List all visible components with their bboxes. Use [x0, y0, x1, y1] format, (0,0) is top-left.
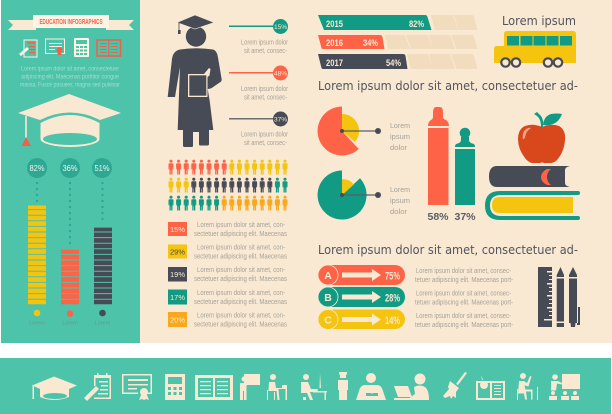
strip icon: student raising hand: [517, 373, 538, 400]
percent bar: 36% coral: Lorem: [62, 320, 78, 326]
legend row: 20%: 20%: [170, 316, 185, 324]
callout: 15%: 15%: [274, 24, 287, 31]
callout: 48%: Lorem ipsum dolor: [241, 86, 289, 93]
year progress bars: 34%: [363, 38, 378, 49]
bar: 37% green with bust top: 37%: [454, 211, 476, 223]
pill bar: C 14%: [318, 310, 405, 330]
percent bar: 82% yellow: [27, 158, 47, 326]
legend row: 17%: 17%: [170, 293, 185, 302]
pie chart: green: dolor: [390, 209, 408, 216]
intro text: adipiscing elit. Maecenas porttitor congue: [21, 74, 119, 80]
pill bar: C 14%: 14%: [385, 315, 400, 327]
strip icon: teacher with students: [549, 374, 580, 400]
legend row: 15%: Lorem ipsum dolor sit amet, con-: [197, 222, 286, 229]
intro text: [20, 66, 121, 88]
callout: 15%: sit amet, consec-: [244, 48, 288, 55]
callout: 48%: 48%: [274, 70, 287, 78]
pill bar: B 28%: [318, 287, 405, 307]
callout: 48%: sit amet, consec-: [244, 94, 288, 102]
legend row: 15%: 15%: [170, 225, 185, 234]
pie chart: green: Lorem: [390, 187, 410, 194]
strip icon: student at desk: [267, 374, 287, 400]
bottom icon strip: [0, 358, 611, 414]
panel: cream main area: [140, 0, 612, 343]
icon: calendar and pencil: [19, 40, 37, 57]
heading: section two: Lorem ipsum dolor sit amet, consectetuer ad-: [318, 243, 578, 257]
strip icon: graduation cap: [32, 376, 77, 400]
percent bar: 82% yellow: Lorem: [29, 320, 45, 326]
legend row: 19%: sectetuer adipiscing elit. Maecenas: [194, 276, 287, 283]
percent bar: 36% coral: [60, 158, 80, 326]
legend row: 29%: [168, 244, 287, 260]
callout: 37%: 37%: [274, 116, 287, 124]
pie chart: green: [318, 170, 410, 219]
pill text A: Lorem ipsum dolor sit amet, consec-: [416, 268, 512, 275]
ribbon heading: [8, 15, 134, 30]
legend row: 17%: Lorem ipsum dolor sit amet, con-: [197, 290, 286, 297]
legend row: 19%: [168, 267, 287, 283]
legend row: 19%: Lorem ipsum dolor sit amet, con-: [197, 267, 286, 274]
percent bar: 51% dark: [92, 158, 112, 326]
strip icon: student at computer: [301, 373, 327, 400]
strip icon: certificate: [122, 374, 152, 400]
pie chart: coral: Lorem: [390, 123, 410, 130]
legend row: 20%: [168, 312, 287, 328]
percent bar: 51% dark: Lorem: [95, 320, 111, 326]
strip icon: person with laptop: [394, 374, 429, 400]
heading: Lorem ipsum: Lorem ipsum: [502, 14, 576, 28]
legend row: 15%: [168, 222, 287, 238]
legend row: 19%: 19%: [170, 270, 185, 279]
icon: calculator: [74, 38, 89, 57]
pill text B: tetuer adipiscing elit. Maecenas port-: [415, 300, 514, 306]
strip icon: calculator: [165, 374, 185, 400]
year progress bars: 2017: [326, 58, 343, 69]
strip icon: broom: [443, 372, 467, 399]
pill bar: A 75%: A: [324, 270, 332, 282]
legend row: 29%: sectetuer adipiscing elit. Maecenas: [194, 254, 287, 260]
percent bar: 82% yellow: 82%: [30, 164, 44, 173]
legend row: 29%: Lorem ipsum dolor sit amet, con-: [197, 244, 286, 252]
legend row: 20%: Lorem ipsum dolor sit amet, con-: [197, 312, 286, 320]
pictogram grid of people: [168, 160, 288, 210]
pill bar: A 75%: 75%: [385, 270, 400, 282]
percent bar: 51% dark: 51%: [94, 164, 110, 173]
year progress bars: 2016: [326, 38, 343, 49]
percent bar: 36% coral: 36%: [62, 164, 78, 173]
year progress bars: 54%: [386, 58, 401, 69]
icon: certificate: [46, 39, 64, 55]
pill text B: Lorem ipsum dolor sit amet, consec-: [416, 290, 512, 298]
legend row: 29%: 29%: [170, 248, 185, 256]
legend row: 20%: sectetuer adipiscing elit. Maecenas: [194, 322, 287, 328]
bar: 58% coral with marker top: 58%: [427, 211, 449, 223]
icon: school bus: [494, 31, 576, 67]
bar: 58% coral with marker top: [427, 107, 449, 223]
bar: 37% green with bust top: [454, 128, 476, 223]
pill bar: B 28%: B: [324, 292, 332, 304]
year progress bars: [318, 15, 478, 69]
legend row: 15%: sectetuer adipiscing elit. Maecenas: [194, 231, 287, 238]
ribbon heading: EDUCATION INFOGRAPHICS: [40, 19, 103, 26]
pill text A: [415, 268, 514, 284]
callout: 48%: [229, 66, 289, 102]
icon: open book: [97, 40, 120, 56]
legend row: 17%: [168, 290, 287, 306]
pie chart: coral: [318, 106, 410, 155]
callout: 15%: Lorem ipsum dolor: [241, 40, 289, 46]
pill bar: C 14%: C: [324, 314, 332, 326]
pill bar: A 75%: [318, 265, 405, 285]
pill text B: [415, 290, 514, 306]
icon: graduate figure: [168, 15, 222, 147]
callout: 37%: Lorem ipsum dolor: [241, 132, 289, 138]
strip icon: reader at table: [356, 373, 386, 400]
pill text A: tetuer adipiscing elit. Maecenas port-: [415, 277, 514, 284]
year progress bars: 2015: [326, 19, 344, 30]
icon: graduation cap: [18, 94, 121, 147]
icon: ruler and pens: [538, 267, 580, 327]
callout: 37%: [229, 112, 289, 147]
callout: 37%: sit amet, consec-: [244, 140, 288, 147]
icon: apple on books: [485, 112, 580, 220]
intro text: Lorem ipsum dolor sit amet, consectetuer: [21, 66, 120, 72]
pill bar: B 28%: 28%: [385, 292, 400, 304]
strip icon: graduate standing: [338, 372, 348, 400]
strip icon: book with apple: [476, 375, 505, 400]
pie chart: coral: dolor: [390, 145, 408, 152]
strip icon: open book: [195, 375, 233, 400]
pie chart: coral: ipsum: [390, 134, 410, 141]
heading: section one: Lorem ipsum dolor sit amet, consectetuer ad-: [318, 79, 578, 93]
pill text C: Lorem ipsum dolor sit amet, consec-: [416, 313, 512, 320]
strip icon: calendar and pencil: [84, 373, 111, 401]
pill text C: tetuer adipiscing elit. Maecenas port-: [415, 322, 514, 329]
callout: 15%: [229, 19, 289, 55]
pie chart: green: ipsum: [390, 198, 410, 205]
panel: left teal sidebar: [1, 0, 140, 343]
pill text C: [415, 313, 514, 329]
intro text: massa. Fusce posuere, magna sed pulvinar: [20, 82, 121, 88]
strip icon: teacher at board: [240, 374, 260, 400]
year progress bars: 82%: [409, 19, 424, 30]
legend row: 17%: sectetuer adipiscing elit. Maecenas: [194, 299, 287, 306]
